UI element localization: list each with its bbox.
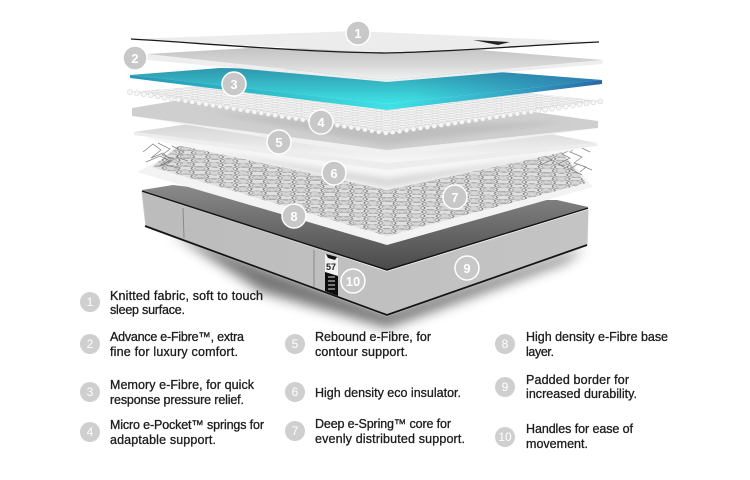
diagram marker 9: 9 xyxy=(463,261,471,276)
legend item 5: contour support. xyxy=(315,345,408,359)
legend item 3: response pressure relief. xyxy=(110,393,244,407)
diagram marker 5 xyxy=(267,130,291,154)
legend item 10: Handles for ease of xyxy=(526,422,634,436)
legend item 10: 10 xyxy=(498,430,512,444)
diagram marker 6 xyxy=(322,161,346,185)
diagram marker 4 xyxy=(309,110,333,134)
diagram marker 9 xyxy=(455,256,479,280)
legend item 3 xyxy=(80,378,255,407)
legend item 1 xyxy=(80,289,263,317)
diagram marker 2 xyxy=(123,46,147,70)
diagram marker 5: 5 xyxy=(275,135,283,150)
legend item 2: fine for luxury comfort. xyxy=(110,345,238,359)
legend item 10 xyxy=(495,422,634,451)
legend item 4: 4 xyxy=(87,425,94,439)
diagram marker 4: 4 xyxy=(317,115,325,130)
legend item 6: 6 xyxy=(292,385,299,399)
legend xyxy=(80,289,668,451)
legend item 9: 9 xyxy=(502,380,509,394)
mattress diagram xyxy=(123,21,603,328)
care label handle xyxy=(325,254,338,296)
layer 3: memory e-fibre xyxy=(130,68,602,110)
legend item 2: 2 xyxy=(87,337,94,351)
legend item 4: adaptable support. xyxy=(110,433,216,447)
legend item 8: layer. xyxy=(526,345,554,359)
layer 1: knitted fabric xyxy=(131,31,599,53)
legend item 3: Memory e-Fibre, for quick xyxy=(110,378,255,392)
legend item 4 xyxy=(80,418,264,447)
diagram marker 3 xyxy=(222,72,246,96)
layer 7: spring core xyxy=(143,143,592,236)
legend item 7 xyxy=(285,417,465,446)
diagram marker 7: 7 xyxy=(451,190,459,205)
layer 4: micro pocket springs xyxy=(130,86,603,133)
diagram marker 10: 10 xyxy=(346,274,360,289)
legend item 8: 8 xyxy=(502,337,509,351)
diagram marker 1 xyxy=(346,21,370,45)
legend item 1: sleep surface. xyxy=(110,303,185,317)
diagram marker 7 xyxy=(443,185,467,209)
legend item 4: Micro e-Pocket™ springs for xyxy=(110,418,264,432)
legend item 5: 5 xyxy=(292,337,299,351)
legend item 7: 7 xyxy=(292,424,299,438)
layer 5: rebound e-fibre xyxy=(134,118,597,188)
legend item 1: Knitted fabric, soft to touch xyxy=(110,289,263,303)
legend item 2 xyxy=(80,330,244,359)
legend item 6: High density eco insulator. xyxy=(315,386,461,400)
legend item 8: High density e-Fibre base xyxy=(526,330,668,344)
legend item 5 xyxy=(285,330,431,359)
diagram marker 2: 2 xyxy=(131,51,139,66)
diagram marker 10 xyxy=(341,269,365,293)
layer 4 lower: grey fibre xyxy=(132,100,598,157)
diagram marker 1: 1 xyxy=(354,26,362,41)
diagram marker 3: 3 xyxy=(230,77,238,92)
legend item 9: Padded border for xyxy=(526,373,629,387)
diagram marker 6: 6 xyxy=(330,166,338,181)
legend item 9: increased durability. xyxy=(526,387,637,401)
diagram marker 8 xyxy=(282,204,306,228)
legend item 3: 3 xyxy=(87,385,94,399)
legend item 8 xyxy=(495,330,668,359)
legend item 9 xyxy=(495,373,637,401)
base shadow xyxy=(170,232,585,328)
layer 2: advance e-fibre xyxy=(147,48,603,82)
care label handle: 57 xyxy=(326,262,336,272)
legend item 5: Rebound e-Fibre, for xyxy=(315,330,431,344)
legend item 7: evenly distributed support. xyxy=(315,432,465,446)
legend item 6 xyxy=(285,382,461,402)
layer 6: eco insulator xyxy=(145,130,592,190)
diagram marker 8: 8 xyxy=(290,209,298,224)
layer 9-10: padded border base xyxy=(142,185,588,316)
legend item 1: 1 xyxy=(87,295,94,309)
legend item 2: Advance e-Fibre™, extra xyxy=(110,330,244,344)
layer 8: base fibre sheet xyxy=(137,160,593,245)
legend item 10: movement. xyxy=(526,437,588,451)
legend item 7: Deep e-Spring™ core for xyxy=(315,417,451,431)
